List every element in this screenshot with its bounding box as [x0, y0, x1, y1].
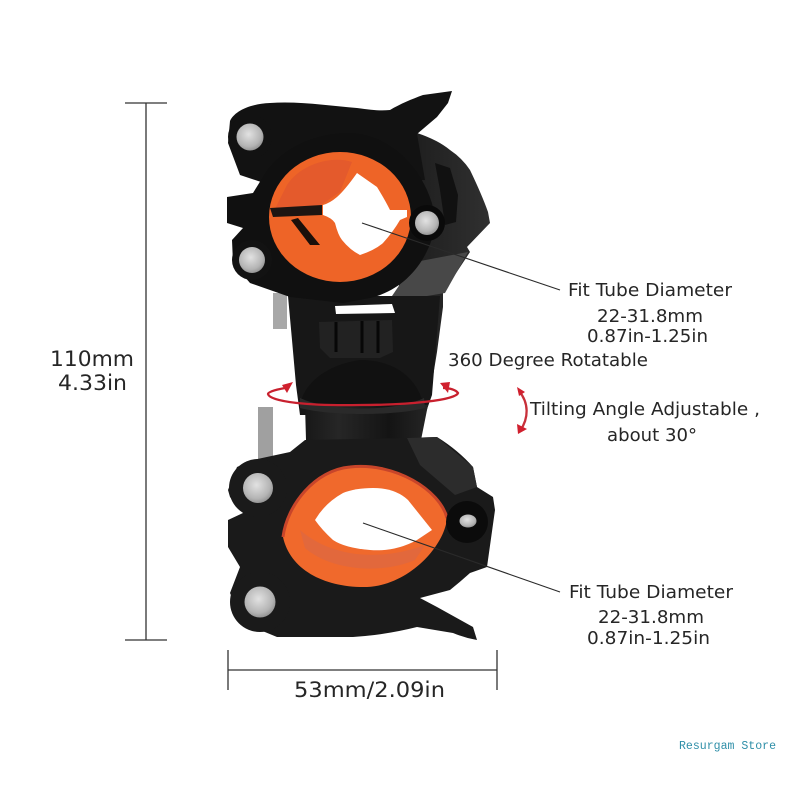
upper tube opening	[323, 173, 407, 255]
lower tube opening	[315, 488, 432, 550]
clamp mount product photo	[227, 91, 495, 640]
rotation arrow	[268, 382, 458, 405]
lower orange collar	[283, 466, 447, 587]
white window behind knob	[335, 304, 395, 314]
upper ear lobes	[228, 115, 272, 280]
rotation callout: 360 Degree Rotatable	[448, 350, 648, 371]
upper tube diameter callout	[568, 280, 733, 347]
ball joint	[300, 360, 424, 407]
tilt arrow	[517, 387, 527, 434]
upper clamp slot	[270, 205, 322, 217]
width label: 53mm/2.09in	[294, 678, 445, 702]
lower tube diameter callout	[569, 582, 734, 649]
housing strap detail	[435, 163, 458, 225]
tilt callout: about 30°	[607, 425, 697, 446]
store watermark: Resurgam Store	[679, 740, 776, 753]
upper clamp ring	[227, 133, 436, 303]
width dimension line	[228, 650, 497, 690]
upper orange collar	[269, 152, 411, 282]
lower leader line	[363, 523, 560, 592]
collar red edge	[283, 466, 447, 537]
lower neck	[295, 405, 440, 470]
tilt callout: Tilting Angle Adjustable ,	[529, 399, 760, 420]
upper tube diameter callout: 0.87in-1.25in	[587, 327, 708, 347]
lower tube diameter callout: 0.87in-1.25in	[587, 629, 710, 649]
upper tube diameter callout: 22-31.8mm	[597, 307, 703, 327]
cup below ball	[300, 398, 425, 414]
lever upper	[228, 91, 452, 185]
collar shaded band	[300, 530, 425, 569]
upper leader line	[362, 223, 560, 290]
lower right highlight	[407, 437, 477, 495]
collar shaded patch	[275, 160, 352, 209]
lower tube diameter callout: Fit Tube Diameter	[569, 582, 734, 603]
upper screws	[236, 124, 445, 273]
height label: 4.33in	[58, 371, 127, 396]
upper threaded bolt	[273, 293, 287, 329]
height dimension line	[125, 103, 167, 640]
height label	[50, 347, 134, 396]
upper tube diameter callout: Fit Tube Diameter	[568, 280, 733, 301]
height label: 110mm	[50, 347, 134, 372]
neck backdrop between arms and ball	[288, 296, 440, 415]
collar inner slot	[291, 218, 320, 245]
upper right housing	[380, 133, 490, 395]
rotation knob	[319, 320, 393, 358]
lower tube diameter callout: 22-31.8mm	[598, 608, 704, 628]
lower screws	[243, 473, 488, 618]
grey shoulder highlight	[392, 252, 468, 298]
lower clamp body	[228, 437, 495, 640]
lower threaded bolt	[258, 407, 273, 461]
tilt callout	[529, 399, 760, 446]
lower ear lobes	[229, 459, 290, 632]
